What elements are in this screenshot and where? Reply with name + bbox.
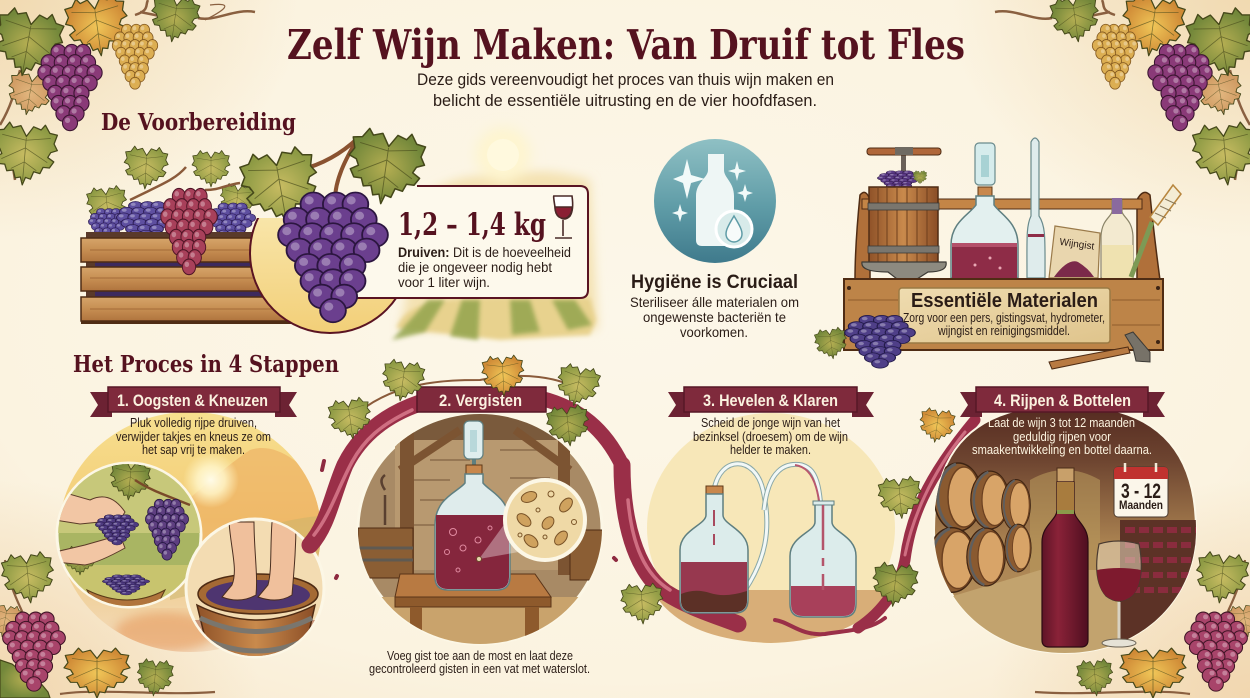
panel: preparation illustration <box>81 121 598 340</box>
callout box: 1,2 – 1,4 kg <box>398 207 546 243</box>
banner: step 1 <box>90 387 297 417</box>
step 3 text <box>693 415 848 457</box>
bottle brush <box>1131 185 1181 277</box>
heading: De Voorbereiding: De Voorbereiding <box>101 108 296 136</box>
callout box <box>345 186 588 298</box>
subtitle <box>417 71 834 110</box>
title: Zelf Wijn Maken: Van Druif tot Fles <box>287 21 965 69</box>
banner: step 4: 4. Rijpen & Bottelen <box>994 391 1131 410</box>
wine ribbon from step 2 to step 4 <box>622 420 975 634</box>
wine press <box>862 147 946 286</box>
yeast packet: Wijngist <box>1059 237 1095 253</box>
corner decoration: top left vines and grapes <box>0 0 255 188</box>
corner decoration: bottom left vines and grapes <box>0 550 215 698</box>
corner decoration: top right vines and grapes <box>995 0 1250 188</box>
panel: hygiene: Hygiëne is Cruciaal <box>631 272 798 293</box>
wine ribbon from step 1 to step 3 <box>310 398 622 578</box>
subtitle: belicht de essentiële uitrusting en de vier hoofdfasen. <box>433 92 817 110</box>
step 2 text <box>369 648 590 676</box>
heading: Het Proces in 4 Stappen: Het Proces in 4 Stappen <box>73 350 339 378</box>
step 4 text: smaakentwikkeling en bottel daarna. <box>972 442 1152 457</box>
banner: step 1: 1. Oogsten & Kneuzen <box>117 391 268 410</box>
step 3 backdrop circle <box>647 413 895 643</box>
calendar: 3 - 12 Maanden: Maanden <box>1119 500 1163 512</box>
sunset background circle <box>59 412 330 652</box>
step 1 text: verwijder takjes en kneus ze om <box>116 429 271 444</box>
subtitle: Deze gids vereenvoudigt het proces van thuis wijn maken en <box>417 71 834 89</box>
icon: wine glass <box>554 196 573 238</box>
vine leaves over step 2 <box>327 355 603 448</box>
wooden crate with grapes <box>81 146 301 324</box>
corner decoration: bottom right vines and grapes <box>1035 550 1250 698</box>
brass plaque <box>899 288 1110 343</box>
crushing grapes with feet circle <box>186 519 326 660</box>
calendar: 3 - 12 Maanden: 3 - 12 <box>1121 480 1161 503</box>
banner: step 3 <box>668 387 874 417</box>
toolbox back and handle <box>855 192 1160 280</box>
yellow highlight circle <box>249 218 397 334</box>
banner: step 4 <box>960 387 1165 417</box>
picking hands circle <box>55 460 201 610</box>
calendar: 3 - 12 Maanden <box>1114 463 1168 517</box>
step 3 text: helder te maken. <box>730 442 811 457</box>
panel: hygiene: voorkomen. <box>680 324 748 340</box>
callout box: die je ongeveer nodig hebt <box>398 259 552 275</box>
banner: step 3: 3. Hevelen & Klaren <box>703 391 838 410</box>
step 1 text <box>116 415 271 457</box>
panel: hygiene <box>630 139 799 340</box>
panel: step 2 fermenting <box>327 355 610 676</box>
brass plaque: wijngist en reinigingsmiddel. <box>937 324 1070 338</box>
left carboy with sediment <box>680 486 748 613</box>
right carboy with clear wine <box>790 501 856 617</box>
panel: step 4 ageing and bottling <box>928 387 1200 660</box>
panel: hygiene: Steriliseer álle materialen om <box>630 294 799 310</box>
cellar circle <box>358 410 610 647</box>
cellar circle <box>928 405 1200 660</box>
wine bottle <box>1042 468 1088 647</box>
brass plaque: Essentiële Materialen <box>911 290 1098 312</box>
siphon tube <box>714 464 823 590</box>
icon: teal circle with bottle <box>654 139 776 263</box>
step 4 text: geduldig rijpen voor <box>1013 429 1112 444</box>
grapes and leaf <box>813 315 915 368</box>
banner: step 2 <box>417 387 546 412</box>
toolbox front <box>844 279 1163 350</box>
callout box: Druiven: Dit is de hoeveelheid <box>398 244 571 260</box>
panel: essential materials toolbox <box>813 138 1181 369</box>
step 4 text <box>972 415 1152 457</box>
step 2 text: Voeg gist toe aan de most en laat deze <box>387 648 573 663</box>
magnifier: yeast cells <box>476 480 585 562</box>
step 1 text: het sap vrij te maken. <box>142 442 245 457</box>
fermenter with airlock <box>435 421 510 590</box>
panel: hygiene: ongewenste bacteriën te <box>643 309 786 325</box>
brass plaque: Zorg voor een pers, gistingsvat, hydrometer, <box>903 311 1105 325</box>
wine glass <box>1097 541 1141 647</box>
step 4 text: Laat de wijn 3 tot 12 maanden <box>988 415 1135 430</box>
step 1 text: Pluk volledig rijpe druiven, <box>130 415 257 430</box>
panel: step 3 racking and clearing <box>620 387 957 625</box>
ribbon leaves <box>620 407 957 625</box>
panel: step 1 harvest and crush <box>55 412 330 660</box>
hammer <box>1049 332 1150 369</box>
yeast packet <box>1049 226 1100 278</box>
step 2 text: gecontroleerd gisten in een vat met waterslot. <box>369 661 590 676</box>
step 3 text: Scheid de jonge wijn van het <box>701 415 840 430</box>
vineyard landscape <box>392 121 598 340</box>
banner: step 2: 2. Vergisten <box>439 391 522 410</box>
step 3 text: bezinksel (droesem) om de wijn <box>693 429 848 444</box>
hydrometer <box>1027 138 1045 278</box>
large grape bunch with leaves <box>237 126 428 322</box>
callout box: voor 1 liter wijn. <box>398 274 490 290</box>
glass fermenter with airlock <box>951 143 1018 278</box>
bottle of cleaning fluid <box>1101 198 1133 278</box>
